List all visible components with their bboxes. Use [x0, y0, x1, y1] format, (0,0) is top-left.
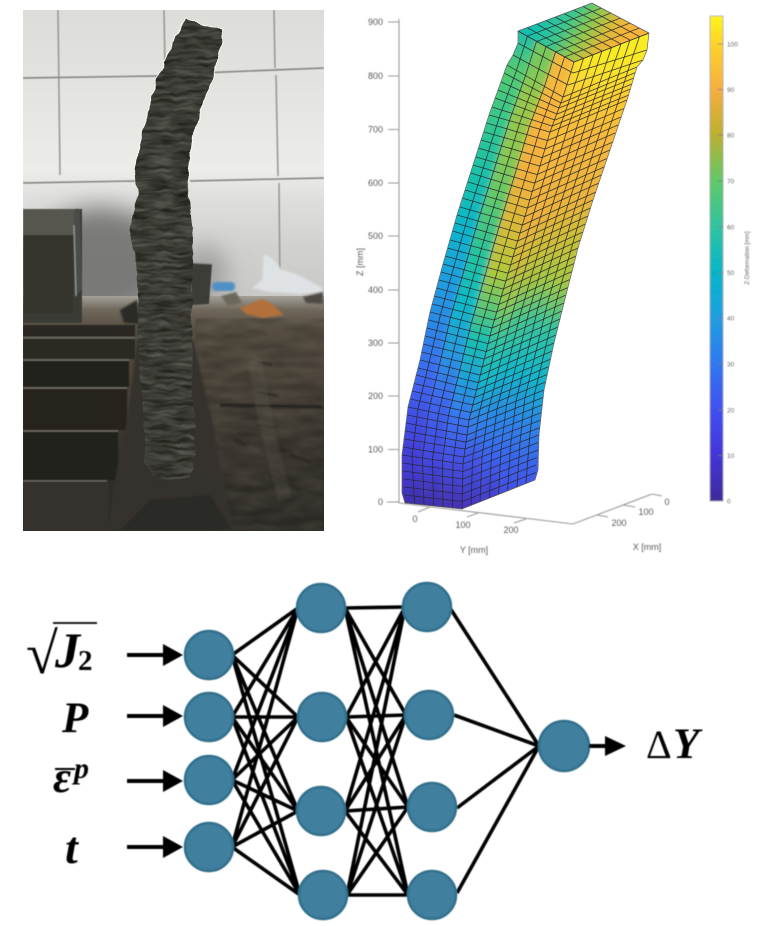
output arrow	[589, 736, 626, 756]
colorbar: 10	[727, 453, 735, 460]
stairs	[23, 325, 135, 531]
colorbar	[710, 16, 751, 506]
X and Y axes: 0	[664, 497, 670, 507]
Z axis: 500	[368, 231, 383, 241]
plastic bag	[252, 254, 322, 294]
Z axis: 200	[368, 391, 383, 401]
panel: neural network diagram	[26, 583, 703, 919]
X and Y axes: X [mm]	[633, 542, 661, 552]
hidden layer 2 nodes	[403, 583, 456, 919]
label: P: P	[61, 695, 89, 742]
Z axis: Z [mm]	[355, 248, 365, 276]
colorbar: 80	[727, 132, 735, 140]
Z axis: 0	[378, 497, 383, 507]
Z axis: 800	[368, 71, 383, 81]
hidden layer 1 nodes	[297, 584, 347, 919]
colorbar: 100	[727, 42, 738, 48]
network connections	[232, 607, 539, 895]
Z axis: 300	[368, 338, 383, 348]
Z axis: 100	[368, 444, 383, 454]
panel: FE deformation plot	[355, 3, 751, 555]
floor	[23, 296, 324, 531]
colorbar: 40	[727, 316, 735, 322]
mesh column lines	[412, 36, 640, 509]
Z axis: 600	[368, 178, 383, 188]
colorbar: 90	[727, 87, 735, 94]
X and Y axes: Y [mm]	[460, 545, 488, 555]
colorbar: 60	[727, 224, 735, 232]
Z axis: 900	[368, 17, 383, 27]
colorbar: 0	[727, 498, 731, 506]
colorbar: Z-Deformation [mm]	[745, 231, 751, 285]
blue cloth	[212, 282, 235, 291]
Z axis: 400	[368, 285, 383, 295]
mesh row lines	[402, 31, 649, 509]
label: root J2: 2	[78, 645, 92, 677]
Z axis: 700	[368, 124, 383, 134]
label: equivalent plastic strain	[53, 752, 89, 802]
deformed mesh surface	[402, 4, 649, 509]
label: t: t	[65, 822, 79, 873]
X and Y axes: 100	[455, 520, 471, 530]
floor texture	[195, 318, 324, 531]
deformed concrete column	[130, 18, 224, 480]
X and Y axes: 200	[503, 525, 519, 535]
label: root J2: √	[26, 621, 58, 686]
X and Y axes: 0	[412, 514, 418, 524]
label: delta Y: Δ	[646, 722, 672, 767]
debris	[221, 292, 323, 306]
floor crack and stains	[220, 360, 323, 500]
label: equivalent plastic strain: p	[71, 752, 89, 785]
colorbar: 50	[727, 270, 735, 277]
shaded wall area	[30, 207, 227, 317]
output node	[539, 721, 589, 771]
label: equivalent plastic strain: ε	[53, 753, 71, 802]
wall tile joints	[23, 10, 324, 290]
column base ledge	[107, 300, 233, 531]
top face of mesh	[518, 3, 649, 62]
storage box	[23, 209, 82, 323]
input arrows	[127, 644, 183, 858]
label: delta Y	[646, 721, 703, 768]
wall background	[23, 10, 324, 310]
colorbar: 70	[727, 178, 735, 186]
orange rag	[240, 299, 284, 318]
label: root J2	[26, 621, 97, 686]
Z axis	[355, 17, 399, 507]
input layer nodes	[185, 631, 233, 871]
colorbar: 20	[727, 408, 735, 414]
panel: photo of deformed column	[23, 10, 324, 531]
bucket	[190, 263, 212, 305]
label: delta Y: Y	[673, 721, 703, 768]
X and Y axes: 100	[638, 507, 654, 517]
X and Y axes	[399, 494, 670, 555]
mesh outline	[402, 3, 649, 509]
label: root J2: J	[54, 622, 82, 678]
colorbar: 30	[727, 362, 735, 368]
X and Y axes: 200	[611, 518, 627, 528]
